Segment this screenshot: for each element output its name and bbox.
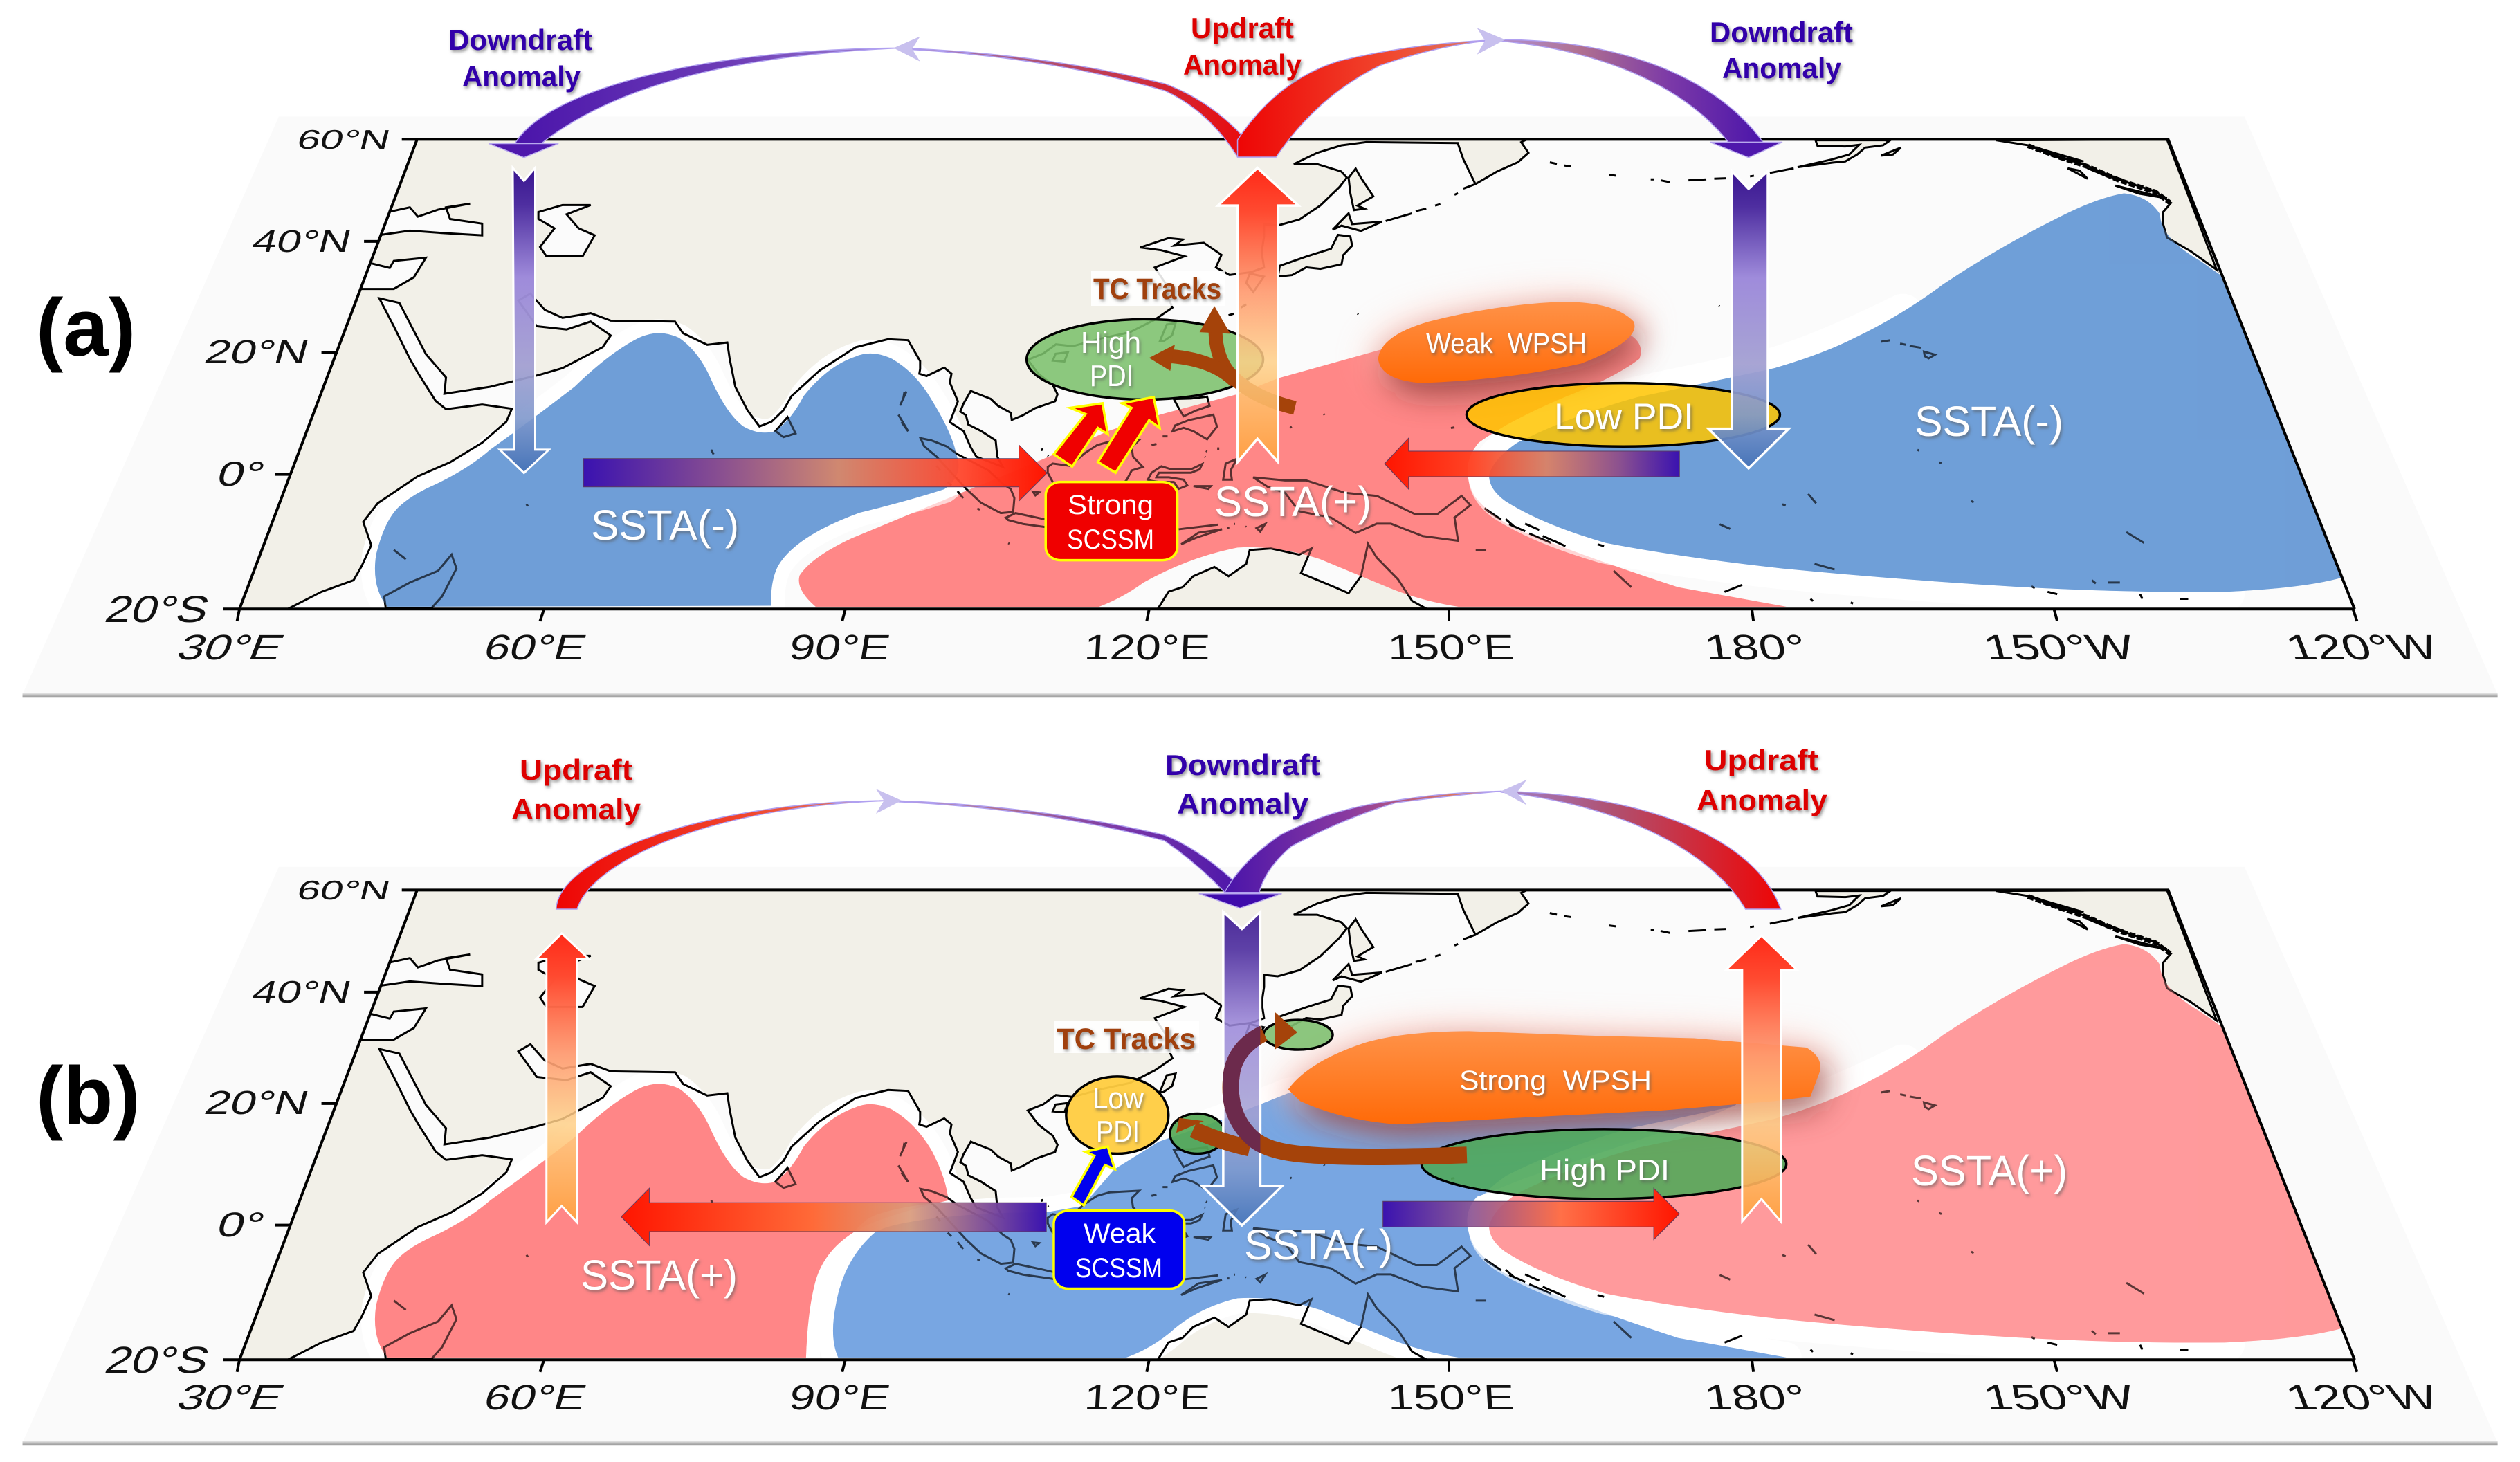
panel a: Downdraft Anomaly left label: Downdraft <box>448 24 592 56</box>
panel a: High PDI text <box>1081 326 1141 393</box>
panel a: longitude labels: 150°E <box>1387 628 1515 667</box>
panel a: Updraft Anomaly label <box>1183 12 1302 81</box>
panel b: SSTA labels: SSTA(+) <box>581 1252 738 1299</box>
panel b: SSTA labels: SSTA(-) <box>1244 1221 1393 1268</box>
panel b: Updraft Anomaly left label <box>511 753 641 825</box>
panel a: SSTA labels: SSTA(-) <box>591 502 739 549</box>
SST cold region: Indian Ocean <box>375 333 958 607</box>
SST warm region: eastern Pacific <box>1489 944 2341 1343</box>
panel (a) <box>23 12 2498 697</box>
panel a: left downdraft arrow <box>500 167 549 473</box>
panel b: Weak SCSSM box <box>1054 1211 1185 1289</box>
panel a: Strong SCSSM box <box>1046 482 1178 560</box>
panel a: longitude labels: 90°E <box>787 628 893 667</box>
panel a: monsoon arrows <box>1054 397 1160 473</box>
panel a: Weak WPSH blob <box>1378 302 1640 397</box>
panel b: longitude labels <box>172 1378 2444 1418</box>
panel a: Updraft Anomaly label: Updraft <box>1191 12 1294 44</box>
panel a: easterly SST gradient arrow <box>1385 438 1679 489</box>
panel a: longitude labels: 120°E <box>1083 628 1211 667</box>
panel b: projected sheet <box>23 867 2498 1445</box>
coastlines <box>239 139 2217 609</box>
panel b: longitude labels: 60°E <box>480 1378 591 1417</box>
panel a: circulation arc left <box>489 37 1260 158</box>
panel b: Downdraft Anomaly label: Downdraft <box>1165 749 1320 781</box>
panel b: circulation arc left <box>556 789 1245 909</box>
panel b: longitude labels: 120°W <box>2280 1378 2444 1418</box>
panel b: circulation arc right <box>1199 780 1781 909</box>
panel b: High PDI ellipse <box>1421 1129 1787 1199</box>
panel b: right updraft arrow <box>1726 935 1797 1221</box>
coastlines <box>239 890 2217 1360</box>
panel a: panel letter: (a) <box>36 282 136 374</box>
frame and axis ticks <box>223 890 2357 1372</box>
panel b: Downdraft Anomaly label <box>1165 749 1320 820</box>
panel a: Downdraft Anomaly right label: Downdraft <box>1710 16 1853 48</box>
panel a: longitude labels: 150°W <box>1979 628 2138 667</box>
SST cold region: Pacific <box>1489 194 2341 592</box>
panel b: panel letter: (b) <box>36 1050 140 1142</box>
panel a: longitude labels: 30°E <box>172 628 289 668</box>
SST cold region: western Pacific <box>833 1093 1787 1358</box>
panel a: westerly SST gradient arrow <box>583 445 1047 501</box>
panel b: latitude labels: 0° <box>213 1205 269 1244</box>
panel b: longitude labels: 150°W <box>1979 1378 2138 1417</box>
panel b: Downdraft Anomaly label: Anomaly <box>1177 787 1309 820</box>
panel a: High PDI ellipse <box>1027 319 1263 399</box>
panel b: Weak SCSSM box: Weak <box>1084 1218 1156 1249</box>
panel b: latitude labels: 20°S <box>101 1339 214 1381</box>
panel b: latitude labels: 20°N <box>201 1085 313 1122</box>
panel b: longitude labels: 90°E <box>787 1378 893 1417</box>
panel a: latitude labels: 60°N <box>294 125 394 155</box>
panel b: central downdraft arrow <box>1202 912 1282 1225</box>
panel b: Updraft Anomaly left label: Updraft <box>520 753 632 786</box>
panel a: latitude labels <box>101 125 394 630</box>
panel a: Weak WPSH text: Weak WPSH <box>1426 327 1587 359</box>
panel a: longitude labels: 180° <box>1701 628 1808 667</box>
panel a: TC Tracks label: TC Tracks <box>1093 273 1221 306</box>
panel a: longitude labels: 60°E <box>480 628 591 667</box>
panel b: monsoon arrow <box>1071 1146 1115 1205</box>
panel a: Strong SCSSM box: Strong <box>1068 490 1153 520</box>
panel b: latitude labels: 60°N <box>294 876 394 906</box>
panel b: left updraft arrow <box>536 933 589 1223</box>
panel a: projected sheet <box>23 116 2498 697</box>
panel b: Low PDI text <box>1093 1081 1144 1149</box>
panel a: Downdraft Anomaly left label <box>448 24 592 93</box>
panel a: latitude labels: 40°N <box>249 224 355 259</box>
panel b: SSTA labels: SSTA(+) <box>1911 1147 2067 1194</box>
panel b: TC Tracks label: TC Tracks <box>1057 1023 1196 1056</box>
panel b: latitude labels <box>101 876 394 1381</box>
panel b: TC track arrows <box>1176 1012 1467 1157</box>
panel b: latitude labels: 40°N <box>249 975 355 1009</box>
panel a: SSTA labels <box>591 398 2063 549</box>
panel a: central updraft arrow <box>1218 168 1299 462</box>
panel b: longitude labels: 30°E <box>172 1378 289 1418</box>
panel b: Updraft Anomaly right label: Anomaly <box>1697 784 1828 816</box>
panel a: circulation arc right <box>1238 28 1782 158</box>
panel a: TC track arrows <box>1149 306 1295 408</box>
panel b: easterly SST gradient arrow <box>621 1188 1046 1245</box>
frame and axis ticks <box>223 139 2357 621</box>
panel a: Low PDI ellipse <box>1466 383 1780 446</box>
SST warm region: Indian Ocean <box>375 1084 948 1358</box>
panel a: map with SST anomaly regions <box>223 139 2357 621</box>
panel b: High PDI text: High PDI <box>1540 1153 1670 1187</box>
panel b: Low PDI text: Low <box>1093 1081 1144 1115</box>
panel b: map with SST anomaly regions <box>223 890 2357 1372</box>
panel b: westerly SST gradient arrow <box>1383 1188 1679 1239</box>
panel a: right downdraft arrow <box>1708 171 1789 468</box>
panel a: Updraft Anomaly label: Anomaly <box>1183 48 1302 81</box>
panel b: Updraft Anomaly right label <box>1697 744 1828 816</box>
SST warm region <box>799 317 1787 607</box>
panel b: Weak SCSSM box: SCSSM <box>1075 1253 1162 1283</box>
panel b: longitude labels: 120°E <box>1083 1378 1211 1417</box>
panel a: High PDI text: PDI <box>1090 359 1133 393</box>
panel b: small green ellipse north <box>1263 1020 1333 1050</box>
panel b: Strong WPSH text: Strong WPSH <box>1459 1066 1652 1096</box>
panel (b) <box>23 744 2498 1445</box>
panel a: Downdraft Anomaly right label <box>1710 16 1853 84</box>
panel b: Low PDI text: PDI <box>1096 1115 1140 1149</box>
panel a: Downdraft Anomaly left label: Anomaly <box>462 60 581 93</box>
panel b: Strong WPSH blob <box>1288 1031 1829 1138</box>
panel a: Low PDI text: Low PDI <box>1554 396 1694 437</box>
panel b: Updraft Anomaly left label: Anomaly <box>511 793 641 825</box>
panel a: SSTA labels: SSTA(+) <box>1214 478 1371 525</box>
panel b: Updraft Anomaly right label: Updraft <box>1704 744 1818 776</box>
panel a: High PDI text: High <box>1081 326 1141 360</box>
panel b: small green ellipse south <box>1170 1113 1225 1153</box>
panel b: longitude labels: 150°E <box>1387 1378 1515 1417</box>
panel b: SSTA labels <box>581 1147 2067 1299</box>
panel b: Low PDI ellipse <box>1066 1077 1169 1153</box>
panel b: longitude labels: 180° <box>1701 1378 1808 1417</box>
panel a: Downdraft Anomaly right label: Anomaly <box>1722 52 1842 84</box>
panel a: latitude labels: 20°S <box>101 588 214 630</box>
panel a: Strong SCSSM box: SCSSM <box>1067 524 1154 555</box>
panel a: longitude labels: 120°W <box>2280 628 2444 668</box>
panel a: latitude labels: 0° <box>213 455 269 493</box>
panel a: latitude labels: 20°N <box>201 334 313 371</box>
panel a: longitude labels <box>172 628 2444 668</box>
panel a: SSTA labels: SSTA(-) <box>1915 398 2063 445</box>
